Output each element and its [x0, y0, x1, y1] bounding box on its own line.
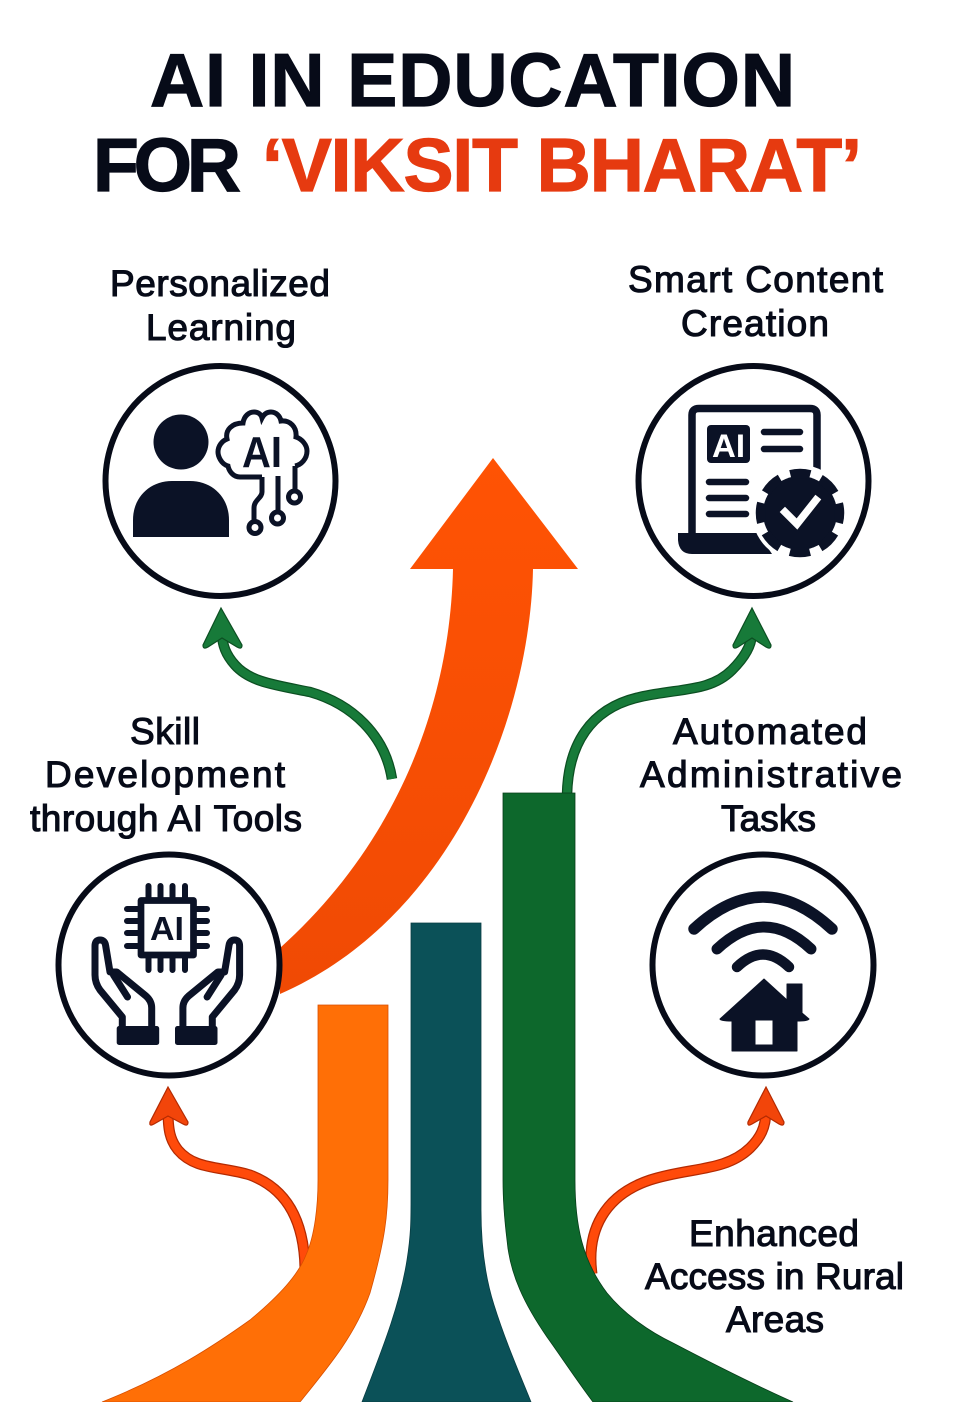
- orange pillar: [102, 1005, 388, 1402]
- icon: house: [720, 979, 809, 1051]
- label: personalized learning: Learning: [146, 307, 296, 348]
- icon: AI brain with circuits: [218, 412, 307, 534]
- label: enhanced access in rural areas: Enhanced: [689, 1213, 859, 1254]
- panel: skill development icon: [58, 854, 280, 1076]
- panel: personalized learning icon: AI: [242, 428, 282, 477]
- label: smart content creation: Creation: [681, 303, 829, 344]
- panel: smart content icon: [638, 366, 868, 596]
- label: automated administrative tasks: Tasks: [721, 798, 816, 839]
- label: enhanced access in rural areas: Areas: [726, 1299, 824, 1340]
- label: personalized learning: [110, 263, 330, 348]
- arrow: red to enhanced access: [591, 1087, 784, 1274]
- label: personalized learning: Personalized: [110, 263, 330, 304]
- icon: AI chip: [127, 886, 207, 970]
- icon: document: [678, 408, 817, 554]
- icon: document: AI: [712, 428, 745, 464]
- title: FOR: [93, 123, 241, 207]
- panel: personalized learning icon: [106, 366, 336, 596]
- label: smart content creation: Smart Content: [628, 259, 884, 300]
- arrow: green to personalized learning: [203, 608, 392, 779]
- icon: gear with check: [752, 465, 848, 561]
- label: enhanced access in rural areas: Access in Rural: [645, 1256, 904, 1297]
- label: skill development: Development: [45, 754, 286, 795]
- icon: open hands: [95, 940, 240, 1027]
- label: skill development: Skill: [130, 711, 200, 752]
- label: automated administrative tasks: [640, 711, 902, 839]
- big orange growth arrow: [280, 458, 578, 994]
- label: automated administrative tasks: Automated: [673, 711, 867, 752]
- icon: person: [133, 414, 229, 537]
- title: ‘VIKSIT BHARAT’: [262, 123, 862, 207]
- panel: rural access icon: [652, 854, 874, 1076]
- icon: wifi signal: [694, 897, 832, 967]
- label: automated administrative tasks: Administrative: [640, 754, 902, 795]
- green pillar: [503, 793, 793, 1402]
- arrow: red to skill development: [150, 1087, 305, 1268]
- label: smart content creation: [628, 259, 884, 344]
- label: skill development: through AI Tools: [30, 798, 302, 839]
- title: [93, 38, 862, 207]
- arrow: green to smart content: [567, 608, 771, 795]
- panel: skill development icon: AI: [150, 910, 184, 947]
- teal pillar: [362, 923, 531, 1402]
- title: AI IN EDUCATION: [150, 38, 795, 122]
- label: skill development: [30, 711, 302, 839]
- label: enhanced access in rural areas: [645, 1213, 904, 1340]
